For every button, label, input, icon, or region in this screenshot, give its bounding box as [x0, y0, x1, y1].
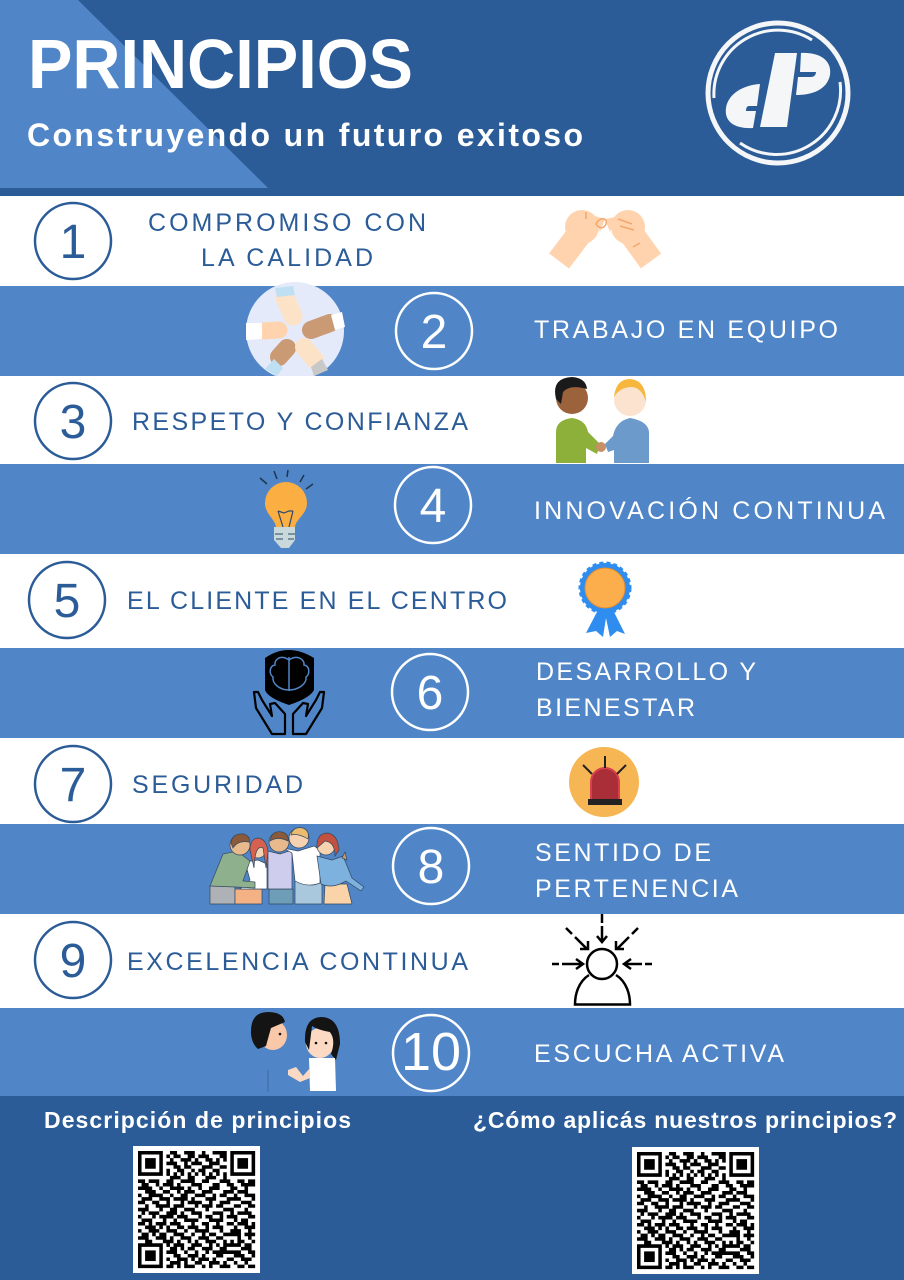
right QR code	[632, 1147, 759, 1274]
panel: principle 1	[0, 196, 904, 286]
number 10 badge	[393, 1015, 469, 1091]
number 5 badge	[29, 562, 105, 638]
icon: pinky promise hands	[559, 210, 651, 261]
number 10 badge: 10	[401, 1022, 461, 1082]
panel: principle 2	[0, 282, 904, 380]
panel: principle 3	[0, 376, 904, 464]
number 8 badge: 8	[418, 841, 444, 894]
icon: group of friends	[210, 828, 364, 904]
right QR heading: ¿Cómo aplicás nuestros principios?	[473, 1107, 897, 1133]
panel: principle 5	[0, 554, 904, 648]
icon: two people talking	[251, 1012, 340, 1092]
number 3 badge	[35, 383, 111, 459]
icon: brain shield and hands	[254, 650, 324, 734]
panel: header	[0, 0, 904, 196]
number 8 badge	[393, 828, 469, 904]
principle 8 label: SENTIDO DE	[535, 839, 711, 867]
panel: footer QR codes	[0, 1096, 904, 1280]
left QR code	[133, 1146, 260, 1273]
panel: principle 6	[0, 648, 904, 738]
number 4 badge: 4	[420, 480, 446, 533]
principle 9 label: EXCELENCIA CONTINUA	[127, 948, 468, 976]
left QR heading: Descripción de principios	[44, 1107, 351, 1133]
title: PRINCIPIOS	[28, 25, 413, 103]
icon: handshake	[555, 377, 649, 463]
subtitle: Construyendo un futuro exitoso	[27, 117, 583, 153]
number 4 badge	[395, 467, 471, 543]
number 1 badge: 1	[60, 216, 86, 269]
panel: principle 10	[0, 1008, 904, 1096]
number 7 badge: 7	[60, 759, 86, 812]
principle 4 label: INNOVACIÓN CONTINUA	[534, 496, 885, 525]
principle 8 label	[535, 839, 738, 903]
panel: principle 7	[0, 738, 904, 824]
principle 2 label: TRABAJO EN EQUIPO	[534, 316, 838, 344]
principle 6 label	[536, 658, 756, 722]
number 7 badge	[35, 746, 111, 822]
principle 8 label: PERTENENCIA	[535, 875, 738, 903]
number 2 badge: 2	[421, 306, 447, 359]
principle 6 label: BIENESTAR	[536, 694, 695, 722]
number 6 badge: 6	[417, 667, 443, 720]
panel: principle 8	[0, 824, 904, 914]
number 9 badge	[35, 922, 111, 998]
number 1 badge	[35, 203, 111, 279]
principle 7 label: SEGURIDAD	[132, 771, 303, 799]
icon: fist bump circle	[246, 282, 345, 380]
panel: principle 9	[0, 914, 904, 1008]
number 6 badge	[392, 654, 468, 730]
icon: person with incoming arrows	[552, 914, 652, 1004]
number 2 badge	[396, 293, 472, 369]
principle 5 label: EL CLIENTE EN EL CENTRO	[127, 587, 507, 615]
number 3 badge: 3	[60, 396, 86, 449]
principle 1 label: COMPROMISO CON	[148, 209, 426, 237]
number 9 badge: 9	[60, 935, 86, 988]
principle 1 label: LA CALIDAD	[201, 244, 373, 272]
icon: rosette medal	[580, 563, 630, 637]
icon: alarm light	[569, 747, 639, 817]
number 5 badge: 5	[54, 575, 80, 628]
icon: light bulb	[260, 470, 313, 548]
principle 1 label	[148, 209, 426, 272]
panel: principle 4	[0, 464, 904, 554]
logo	[708, 23, 848, 163]
principle 3 label: RESPETO Y CONFIANZA	[132, 408, 468, 436]
principle 6 label: DESARROLLO Y	[536, 658, 756, 686]
header accent triangle	[0, 0, 268, 188]
principle 10 label: ESCUCHA ACTIVA	[534, 1040, 784, 1068]
